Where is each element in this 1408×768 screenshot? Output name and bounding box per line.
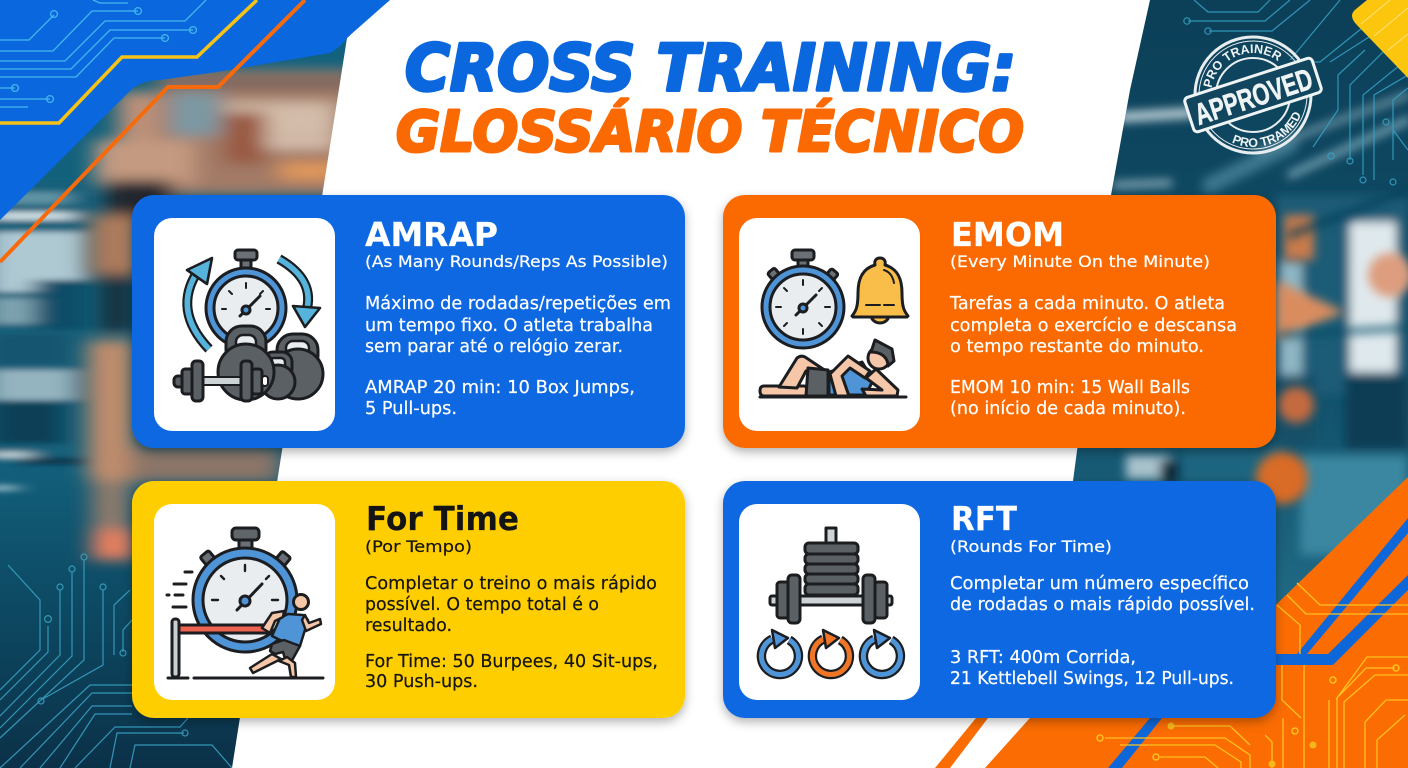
text: EMOM definition xyxy=(949,294,1237,357)
text: For Time example: 30 Push-ups. xyxy=(365,672,478,692)
text: For Time definition xyxy=(365,574,657,636)
heading: AMRAP: AMRAP xyxy=(365,215,498,254)
subtitle: EMOM: (Every Minute On the Minute) xyxy=(950,252,1210,271)
text: RFT example xyxy=(950,648,1234,689)
icon: stopwatch, bell and resting athlete xyxy=(760,250,908,397)
background: teal circuit lines, top right xyxy=(1184,0,1408,185)
text: EMOM definition: completa o exercício e descansa xyxy=(950,316,1237,336)
text: EMOM example: EMOM 10 min: 15 Wall Balls xyxy=(950,378,1190,398)
background: blue circuit corner, top left xyxy=(0,0,390,262)
icon: stopwatch and runner crossing finish line xyxy=(167,528,323,678)
background: white diagonal centre panel xyxy=(232,0,1150,768)
text: RFT example: 21 Kettlebell Swings, 12 Pull-ups. xyxy=(950,669,1234,689)
yellow corner accent, top right xyxy=(1352,0,1408,78)
text: For Time definition: Completar o treino o mais rápido xyxy=(365,574,657,594)
subtitle: RFT: (Rounds For Time) xyxy=(950,537,1112,556)
text: EMOM example xyxy=(950,378,1190,419)
background: orange circuit corner, bottom right xyxy=(935,477,1408,768)
subtitle: AMRAP: (As Many Rounds/Reps As Possible) xyxy=(365,252,668,271)
text: RFT definition: de rodadas o mais rápido possível. xyxy=(950,595,1255,615)
text: RFT example: 3 RFT: 400m Corrida, xyxy=(950,648,1136,668)
text: RFT definition xyxy=(950,574,1255,615)
heading: RFT: RFT xyxy=(951,499,1017,538)
text: EMOM example: (no início de cada minuto). xyxy=(950,399,1186,419)
text: For Time definition: resultado. xyxy=(365,616,452,636)
approved stamp badge: PRO TRAINER xyxy=(1203,44,1282,88)
text: EMOM definition: o tempo restante do minuto. xyxy=(950,337,1204,357)
text: For Time definition: possível. O tempo total é o xyxy=(365,595,599,615)
title xyxy=(396,32,1024,165)
panel: RFT xyxy=(723,481,1276,718)
background photo: blurred gym, right xyxy=(1073,0,1408,605)
subtitle: For Time: (Por Tempo) xyxy=(365,537,472,556)
text: AMRAP definition xyxy=(365,294,671,357)
text: AMRAP example xyxy=(365,378,635,419)
text: For Time example xyxy=(365,652,658,692)
text: RFT definition: Completar um número específico xyxy=(950,574,1249,594)
text: AMRAP definition: um tempo fixo. O atleta trabalha xyxy=(365,316,653,336)
title: GLOSSÁRIO TÉCNICO xyxy=(396,99,1024,165)
text: AMRAP example: AMRAP 20 min: 10 Box Jumps, xyxy=(365,378,635,398)
icon: stopwatch with kettlebells and arrows xyxy=(174,250,323,401)
text: AMRAP definition: Máximo de rodadas/repetições em xyxy=(365,294,671,314)
text: AMRAP example: 5 Pull-ups. xyxy=(365,399,457,419)
icon: loaded barbell with three round arrows xyxy=(761,528,900,675)
approved stamp badge xyxy=(1183,36,1323,154)
approved stamp badge: PRO TRAMED xyxy=(1232,112,1300,148)
background photo: blurred runner, left xyxy=(0,0,360,768)
panel: AMRAP xyxy=(132,195,685,448)
approved stamp badge: APPROVED xyxy=(1191,63,1317,132)
text: EMOM definition: Tarefas a cada minuto. O atleta xyxy=(949,294,1225,314)
title: CROSS TRAINING: xyxy=(405,32,1016,106)
background: teal circuit lines, bottom left xyxy=(0,554,232,768)
heading: EMOM: EMOM xyxy=(951,215,1064,254)
text: AMRAP definition: sem parar até o relógio zerar. xyxy=(365,337,623,357)
panel: For Time xyxy=(132,481,685,718)
text: For Time example: For Time: 50 Burpees, 40 Sit-ups, xyxy=(365,652,658,672)
panel: EMOM xyxy=(723,195,1276,448)
heading: For Time: For Time xyxy=(366,499,519,538)
